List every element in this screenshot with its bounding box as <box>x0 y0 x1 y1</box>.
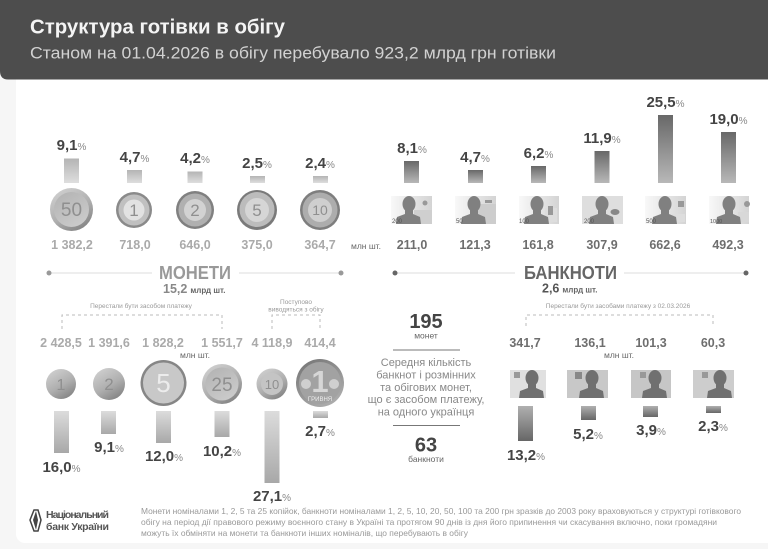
values: circulating coins: 1 382,2 <box>51 238 93 252</box>
values: withdrawn banknotes: 101,3 <box>635 336 667 350</box>
icons: circulating coins <box>50 188 340 231</box>
icons: withdrawn coins: 1 <box>311 364 329 399</box>
icons: circulating coins: 2 <box>190 201 200 220</box>
icons: withdrawn coins: 1 <box>57 377 66 394</box>
header band <box>0 0 768 80</box>
heading: banknotes <box>392 263 748 296</box>
icons: withdrawn coins: ГРИВНЯ <box>308 397 332 403</box>
callout: average per Ukrainian <box>368 311 484 464</box>
icons: circulating banknotes <box>391 196 750 225</box>
heading: coins: МОНЕТИ <box>159 263 231 283</box>
icons: withdrawn coins: 25 <box>211 375 233 396</box>
footnote: обігу на період дії правового режиму воєнного стану в Україні та протягом 90 днів із дня його припинення чи скасування включно, поки громадяни <box>141 517 717 527</box>
logo: National Bank of Ukraine: Національний <box>46 509 109 521</box>
icons: circulating banknotes: 500 <box>646 219 657 225</box>
icons: circulating banknotes: 100 <box>519 219 530 225</box>
icons: circulating coins: 50 <box>61 200 82 221</box>
callout: average per Ukrainian: на одного українця <box>378 406 474 418</box>
unit label: млн шт. <box>351 241 381 251</box>
icons: withdrawn coins: 5 <box>156 368 171 398</box>
chart: withdrawn banknotes share bars <box>518 406 721 441</box>
callout: average per Ukrainian: банкнот і розмінних <box>376 370 476 382</box>
title: Структура готівки в обігу <box>30 16 286 38</box>
values: circulating banknotes: 121,3 <box>459 238 491 252</box>
percent labels: withdrawn coins: 2,7% <box>305 423 335 440</box>
percent labels: withdrawn coins: 10,2% <box>203 443 241 460</box>
unit label: млн шт. <box>604 350 634 360</box>
percent labels: withdrawn banknotes <box>507 418 728 464</box>
values: circulating banknotes: 492,3 <box>712 238 744 252</box>
values: circulating banknotes: 662,6 <box>649 238 681 252</box>
values: circulating coins: 375,0 <box>241 238 273 252</box>
logo: National Bank of Ukraine <box>30 509 109 533</box>
percent labels: circulating banknotes: 11,9% <box>583 130 621 147</box>
bracket: banknotes no longer legal tender: Перестали бути засобами платежу з 02.03.2026 <box>546 302 691 310</box>
callout: average per Ukrainian: 63 <box>415 434 437 456</box>
percent labels: circulating banknotes: 4,7% <box>460 149 490 166</box>
values: withdrawn coins: 4 118,9 <box>251 336 293 350</box>
icons: withdrawn coins: 2 <box>104 375 114 394</box>
callout: average per Ukrainian: Середня кількість <box>381 357 472 369</box>
values: withdrawn coins: 1 551,7 <box>201 336 243 350</box>
percent labels: withdrawn banknotes: 5,2% <box>573 426 603 443</box>
subtitle: Станом на 01.04.2026 в обігу перебувало 923,2 млрд грн готівки <box>30 44 556 62</box>
heading: coins <box>46 263 344 296</box>
bracket: coins no longer legal tender <box>62 302 222 329</box>
percent labels: circulating coins: 2,4% <box>305 155 335 172</box>
percent labels: withdrawn coins: 27,1% <box>253 488 291 505</box>
values: withdrawn banknotes: 136,1 <box>574 336 606 350</box>
icons: circulating banknotes: 50 <box>456 219 463 225</box>
chart: circulating coins share bars <box>64 158 328 183</box>
values: withdrawn banknotes: 60,3 <box>701 336 725 350</box>
values: circulating banknotes: 161,8 <box>522 238 554 252</box>
values: circulating banknotes: 307,9 <box>586 238 618 252</box>
values: withdrawn coins <box>40 336 336 350</box>
values: withdrawn coins: 414,4 <box>304 336 336 350</box>
unit label: млн шт. <box>180 350 210 360</box>
values: withdrawn banknotes: 341,7 <box>509 336 541 350</box>
footnote: можуть їх обміняти на монети та банкноти інших номіналів, що перебувають в обігу <box>141 528 469 538</box>
icons: circulating banknotes: 1000 <box>710 219 722 225</box>
logo: National Bank of Ukraine: банк України <box>46 521 109 533</box>
icons: withdrawn coins: 10 <box>265 377 279 392</box>
percent labels: withdrawn banknotes: 13,2% <box>507 447 545 464</box>
icons: circulating coins: 1 <box>129 201 139 220</box>
callout: average per Ukrainian: 195 <box>409 311 443 333</box>
footnote <box>141 506 741 538</box>
percent labels: withdrawn coins: 12,0% <box>145 448 183 465</box>
heading: coins: 15,2 млрд шт. <box>163 282 225 296</box>
values: withdrawn coins: 1 828,2 <box>142 336 184 350</box>
percent labels: circulating banknotes <box>397 94 748 166</box>
values: circulating banknotes: 211,0 <box>397 238 427 252</box>
icons: circulating banknotes: 200 <box>392 219 403 225</box>
bracket: coins being withdrawn <box>268 299 324 329</box>
percent labels: withdrawn banknotes: 3,9% <box>636 422 666 439</box>
bracket: coins being withdrawn: виводяться з обігу <box>268 306 324 314</box>
chart: circulating banknotes share bars <box>404 115 736 183</box>
percent labels: withdrawn coins <box>42 423 335 505</box>
percent labels: withdrawn coins: 9,1% <box>94 439 124 456</box>
percent labels: circulating coins: 9,1% <box>57 137 86 154</box>
percent labels: withdrawn coins: 16,0% <box>42 459 81 476</box>
percent labels: circulating coins <box>57 137 335 172</box>
bracket: coins being withdrawn: Поступово <box>280 299 312 306</box>
callout: average per Ukrainian: банкноти <box>408 454 444 464</box>
heading: banknotes: 2,6 млрд шт. <box>542 282 597 296</box>
percent labels: withdrawn banknotes: 2,3% <box>698 418 728 435</box>
percent labels: circulating coins: 4,7% <box>120 149 149 166</box>
values: withdrawn coins: 2 428,5 <box>40 336 82 350</box>
bracket: coins no longer legal tender: Перестали бути засобом платежу <box>90 302 193 310</box>
values: withdrawn coins: 1 391,6 <box>88 336 130 350</box>
chart: withdrawn coins share bars <box>54 411 328 483</box>
icons: circulating coins: 10 <box>312 202 328 218</box>
values: circulating banknotes <box>397 238 744 252</box>
percent labels: circulating banknotes: 19,0% <box>709 111 748 128</box>
values: withdrawn banknotes <box>509 336 725 350</box>
icons: circulating coins: 5 <box>252 201 262 220</box>
callout: average per Ukrainian: монет <box>414 330 438 340</box>
percent labels: circulating banknotes: 25,5% <box>646 94 685 111</box>
icons: withdrawn coins <box>46 359 344 407</box>
values: circulating coins: 718,0 <box>119 238 151 252</box>
percent labels: circulating coins: 2,5% <box>242 155 272 172</box>
percent labels: circulating banknotes: 8,1% <box>397 140 427 157</box>
icons: withdrawn banknotes <box>510 370 734 398</box>
heading: banknotes: БАНКНОТИ <box>524 263 617 283</box>
values: circulating coins: 646,0 <box>179 238 211 252</box>
values: circulating coins <box>51 238 336 252</box>
footnote: Монети номіналами 1, 2, 5 та 25 копійок, банкноти номіналами 1, 2, 5, 10, 20, 50, 100 та 200 грн зразків до 2003 року враховуються у структурі готівкового <box>141 506 741 516</box>
percent labels: circulating banknotes: 6,2% <box>524 145 553 162</box>
bracket: banknotes no longer legal tender <box>526 302 713 326</box>
icons: circulating banknotes: 200 <box>584 219 595 225</box>
percent labels: circulating coins: 4,2% <box>180 150 210 167</box>
values: circulating coins: 364,7 <box>304 238 336 252</box>
callout: average per Ukrainian: та обігових монет, <box>380 382 472 394</box>
callout: average per Ukrainian: що є засобом платежу, <box>368 394 484 406</box>
